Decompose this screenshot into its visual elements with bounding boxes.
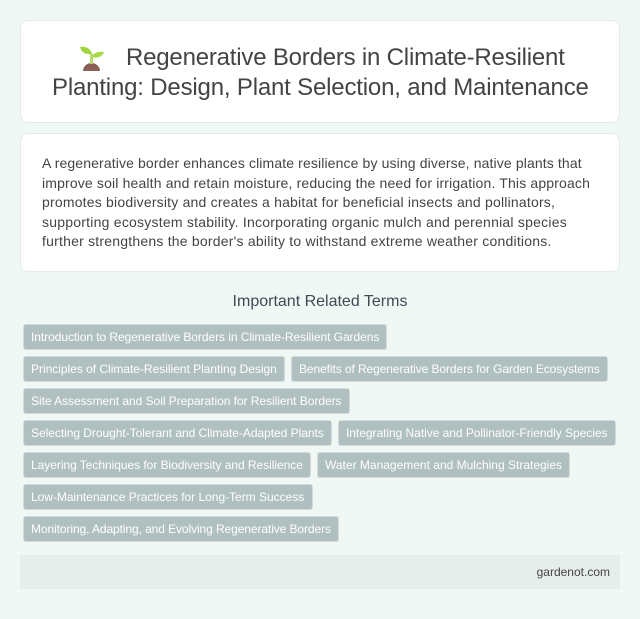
footer text: gardenot.com [537,565,610,579]
tag: Monitoring, Adapting, and Evolving Regenerative Borders [31,522,331,536]
panel: title card [20,20,620,123]
tag: Benefits of Regenerative Borders for Garden Ecosystems [299,362,600,376]
description text: supporting ecosystem stability. Incorporating organic mulch and perennial species [42,214,567,230]
tag [23,516,339,542]
tag [23,452,311,478]
description text: improve soil health and retain moisture, reducing the need for irrigation. This approach [42,175,590,191]
description text: further strengthens the border's ability to withstand extreme weather conditions. [42,233,552,249]
footer bar [20,555,620,589]
tag [291,356,608,382]
tag: Site Assessment and Soil Preparation for Resilient Borders [31,394,342,408]
tag [23,388,350,414]
tag [23,324,387,350]
description text: A regenerative border enhances climate resilience by using diverse, native plants that [42,155,582,171]
description text [42,155,590,249]
icon: seedling [80,46,104,71]
tag: Selecting Drought-Tolerant and Climate-Adapted Plants [31,426,324,440]
tag: Introduction to Regenerative Borders in Climate-Resilient Gardens [31,330,379,344]
heading: important related terms: Important Related Terms [233,293,407,310]
tag: Water Management and Mulching Strategies [325,458,562,472]
title line 2: Planting: Design, Plant Selection, and Maintenance [52,74,589,101]
tag [23,420,332,446]
description text: promotes biodiversity and creates a habitat for beneficial insects and pollinators, [42,194,555,210]
tag: Layering Techniques for Biodiversity and Resilience [31,458,303,472]
tag [23,356,285,382]
tag: Principles of Climate-Resilient Planting Design [31,362,277,376]
tag: Integrating Native and Pollinator-Friendly Species [346,426,607,440]
tag [338,420,616,446]
title line 1: Regenerative Borders in Climate-Resilient [126,44,565,71]
tag list [23,324,616,542]
tag: Low-Maintenance Practices for Long-Term Success [31,490,304,504]
tag [23,484,313,510]
tag [317,452,570,478]
panel: description card [20,133,620,272]
